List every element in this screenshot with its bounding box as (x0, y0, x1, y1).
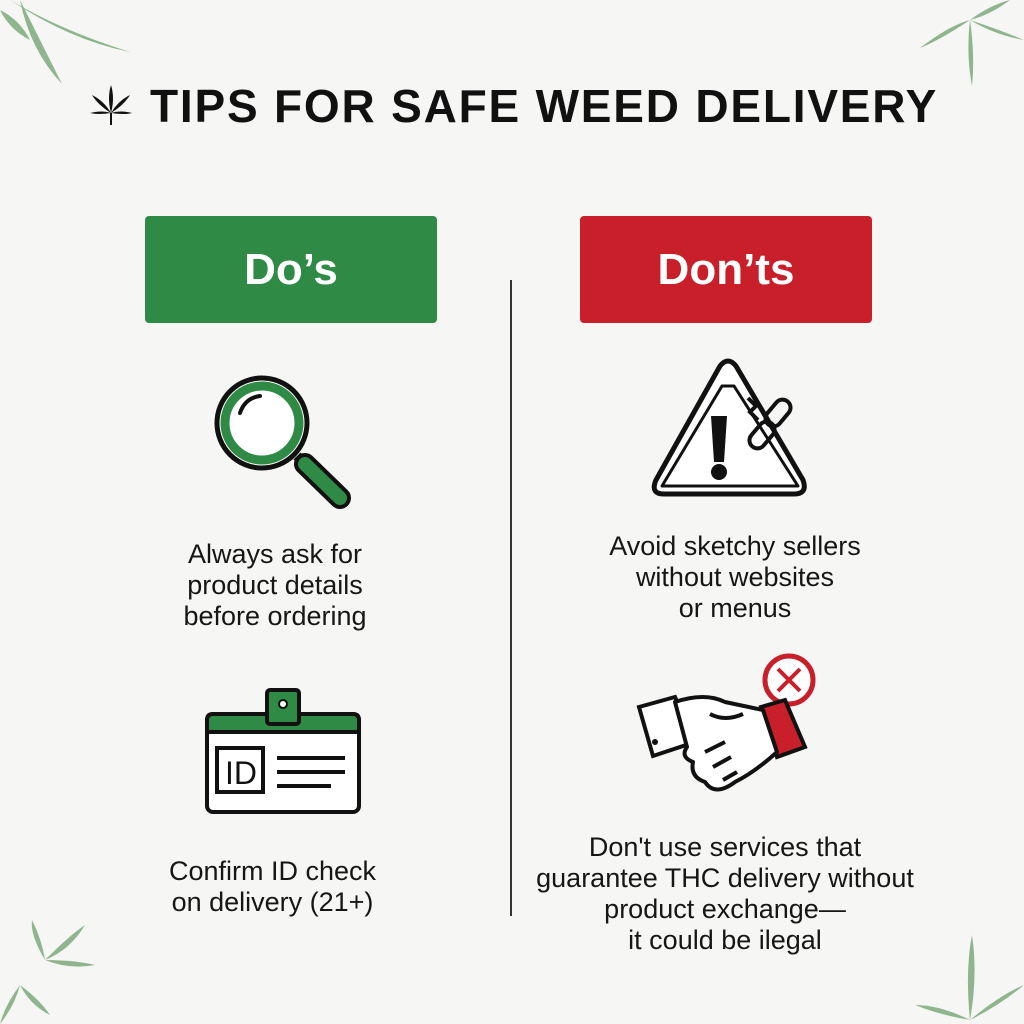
text: THC delivery warning: guarantee THC delivery without (536, 863, 914, 893)
heading: Do's (145, 216, 437, 323)
heading: Do's: Do’s (244, 244, 338, 294)
text: ask for details: before ordering (183, 601, 367, 631)
decorative leaves: top-right (920, 0, 1024, 86)
decorative leaves: bottom-right (915, 935, 1024, 1020)
decorative leaves: top-left (0, 0, 130, 84)
text: avoid sketchy sellers (609, 531, 861, 623)
icon: ID card: ID (225, 755, 257, 791)
text: ask for details: product details (187, 570, 363, 600)
text: avoid sketchy sellers: Avoid sketchy sellers (609, 531, 861, 561)
text: THC delivery warning (536, 832, 914, 955)
text: confirm ID: Confirm ID check (169, 856, 376, 886)
text: avoid sketchy sellers: without websites (636, 562, 834, 592)
icon: leaf (90, 85, 132, 125)
text: confirm ID: on delivery (21+) (172, 887, 373, 917)
text: THC delivery warning: Don't use services that (589, 832, 861, 862)
text: avoid sketchy sellers: or menus (679, 593, 791, 623)
heading: Don'ts (580, 216, 872, 323)
icon: handshake with X (636, 654, 816, 792)
icon: ID card (205, 688, 361, 814)
icon: warning triangle with broken link (652, 358, 807, 496)
text: THC delivery warning: product exchange— (604, 894, 846, 924)
text: confirm ID (169, 856, 376, 917)
text: ask for details: Always ask for (188, 539, 362, 569)
icon: magnifier (214, 376, 351, 509)
text: THC delivery warning: it could be ilegal (628, 925, 822, 955)
decorative leaves: bottom-left (0, 920, 95, 1024)
text: ask for details (183, 539, 367, 631)
title: TIPS FOR SAFE WEED DELIVERY (150, 80, 938, 132)
heading: Don'ts: Don’ts (658, 244, 794, 294)
